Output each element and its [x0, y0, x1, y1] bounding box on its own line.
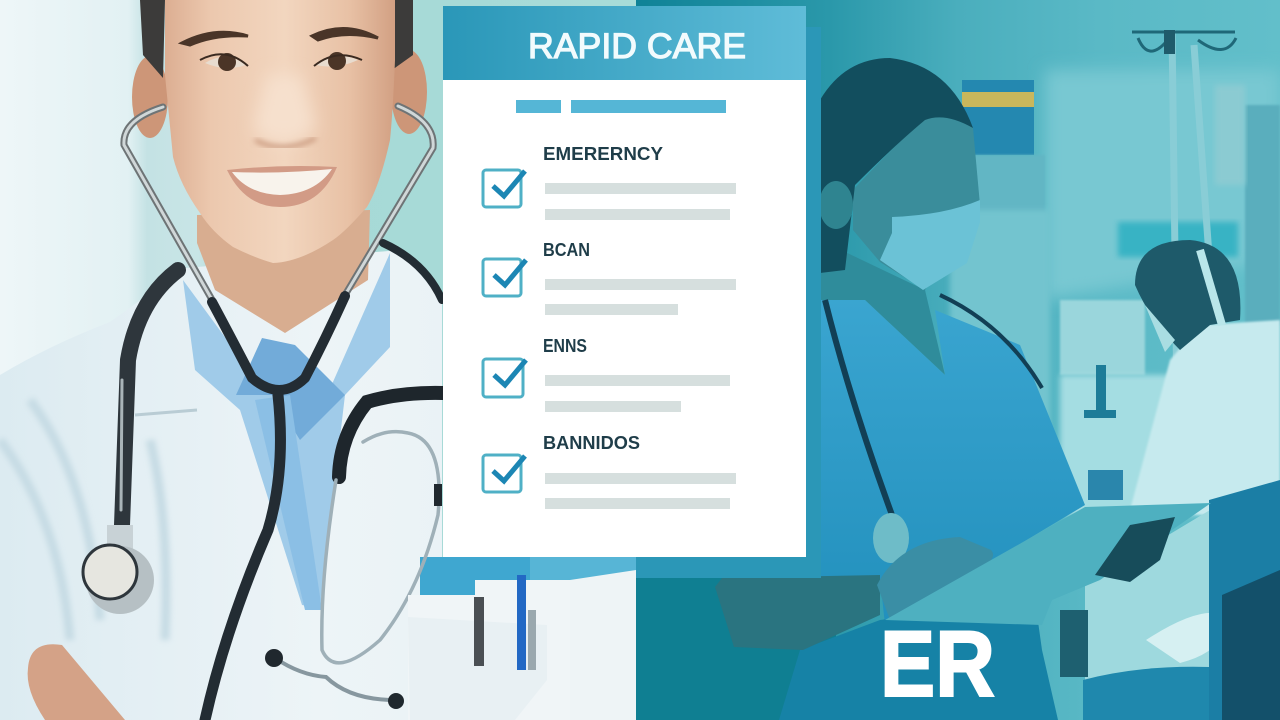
checklist item: emergency [483, 144, 736, 220]
wall details [950, 70, 1280, 515]
nurse stethoscope [825, 295, 1042, 563]
divider bars [516, 100, 726, 113]
checklist item: bannidos [483, 433, 736, 509]
chestpiece [83, 525, 154, 614]
panel: doctor photo [0, 0, 640, 720]
doctor neck [197, 210, 370, 333]
checklist item: enns [483, 336, 730, 412]
surgical mask [880, 200, 980, 290]
coat pocket with pens [408, 570, 636, 720]
nurse scrubs [779, 300, 1085, 720]
background doctor [1130, 240, 1280, 520]
title: RAPID CARE [528, 27, 746, 66]
nurse neck [820, 240, 945, 375]
doctor hair [140, 0, 413, 78]
foreground equipment [1060, 480, 1280, 720]
nurse face [853, 116, 980, 290]
doctor face [165, 0, 395, 263]
glove [877, 537, 993, 620]
checklist item: scan: BCAN [543, 240, 590, 260]
panel: nurse ER photo [636, 0, 1280, 720]
doctor ears [132, 50, 427, 138]
nurse [715, 58, 1211, 720]
stethoscope [121, 106, 443, 720]
card header [443, 6, 806, 80]
nurse hair [820, 58, 973, 273]
nurse ear [819, 181, 853, 229]
checklist item: enns: ENNS [543, 336, 587, 356]
shirt and coat of doctor [0, 250, 636, 720]
card backing shadow [636, 27, 821, 578]
checklist item: scan [483, 240, 736, 315]
nurse arm [715, 575, 880, 650]
checklist item: bannidos: BANNIDOS [543, 433, 640, 453]
ER label: ER [880, 611, 995, 716]
hand [28, 644, 125, 720]
panel: rapid care checklist [443, 6, 806, 557]
checklist item: emergency: EMERERNCY [543, 144, 663, 164]
clipboard [885, 503, 1211, 625]
IV pole [1132, 30, 1245, 480]
dark hand [1095, 517, 1175, 582]
